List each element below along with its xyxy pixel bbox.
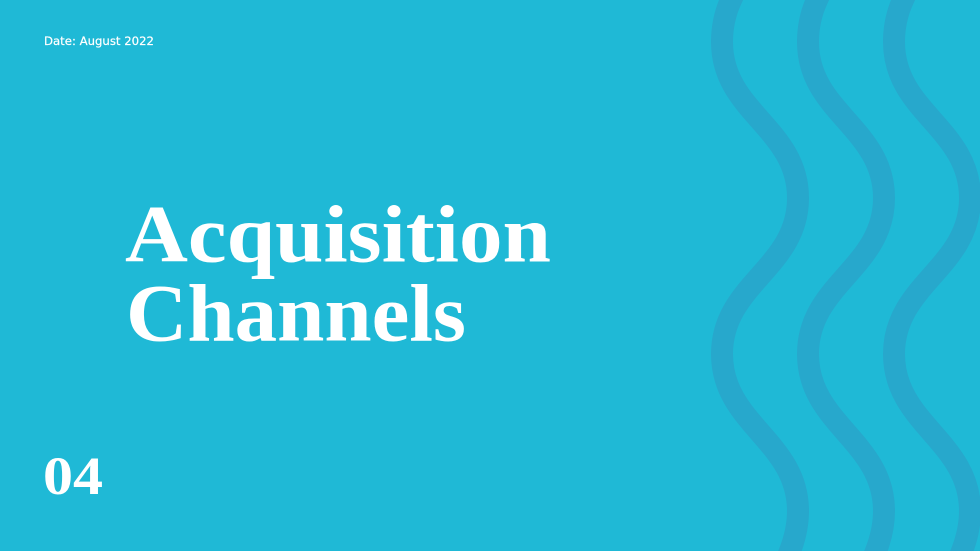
- date label: Date: August 2022: [44, 34, 154, 48]
- title: Acquisition: [125, 188, 551, 280]
- section number: 04: [43, 446, 103, 506]
- title: [125, 188, 551, 358]
- title: Channels: [126, 268, 466, 358]
- wave stripes: [722, 0, 970, 551]
